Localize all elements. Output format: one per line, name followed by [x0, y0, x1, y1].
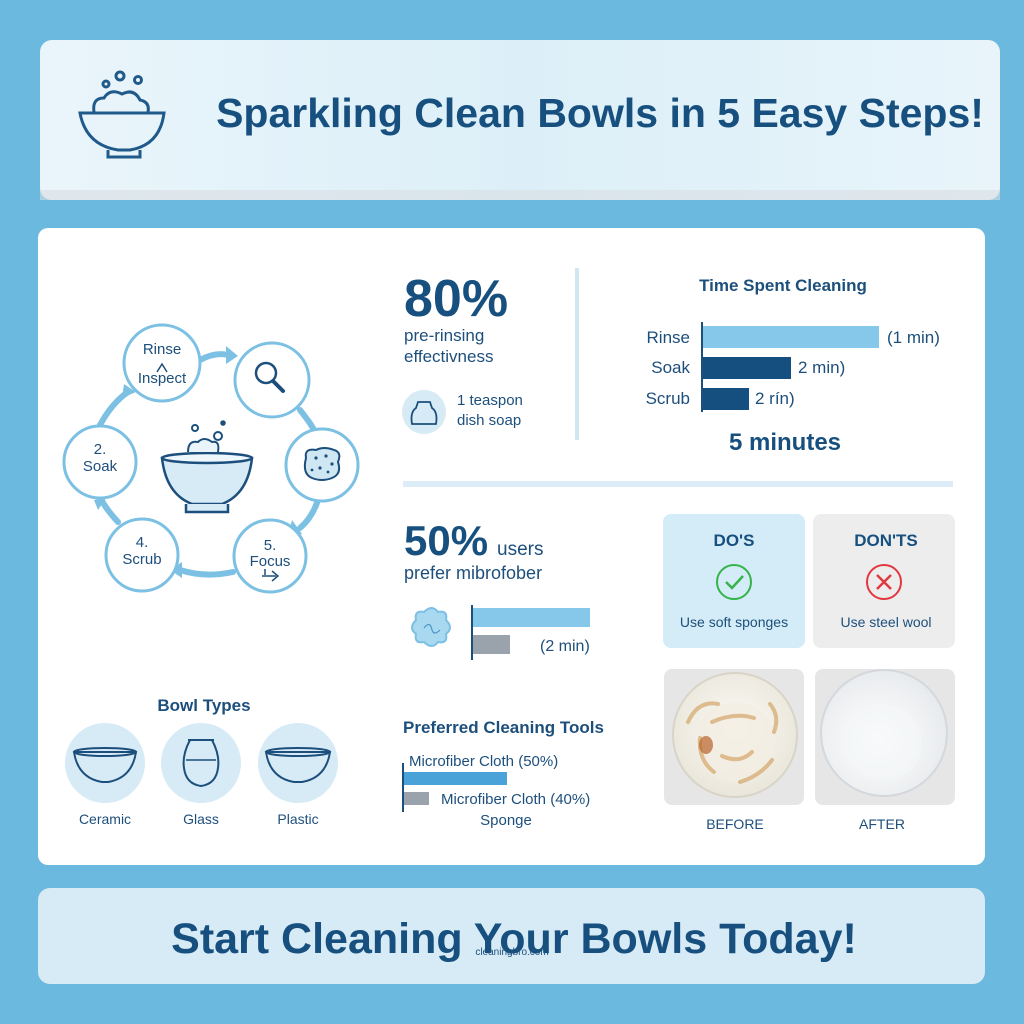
- panel: do's: Use soft sponges: [680, 614, 788, 630]
- photo: before: BEFORE: [706, 816, 764, 832]
- stat: 80%: [402, 270, 523, 434]
- stat: 80%: dish soap: [457, 412, 521, 429]
- icon: center bowl: [162, 422, 252, 512]
- stat: 80%: 1 teaspon: [457, 392, 523, 409]
- step: 4 Scrub: Scrub: [122, 551, 162, 568]
- step: magnifier: [235, 343, 309, 417]
- bar chart: preferred cleaning tools: Microfiber Cloth (40%): [441, 791, 590, 808]
- bar chart: time spent cleaning: Soak: [651, 358, 690, 377]
- bar chart: preferred cleaning tools: Microfiber Cloth (50%): [409, 753, 558, 770]
- step: 5 Focus: [234, 520, 306, 592]
- stat: 50%: (2 min): [540, 638, 590, 655]
- bowl types: [65, 696, 338, 827]
- panel: don'ts: DON'TS: [854, 531, 918, 550]
- icon: ceramic: Ceramic: [79, 811, 131, 827]
- bar chart: time spent cleaning: Time Spent Cleaning: [699, 276, 867, 295]
- bar chart: time spent cleaning: Scrub: [646, 389, 690, 408]
- step: 5 Focus: Focus: [250, 553, 290, 570]
- step: sponge: [286, 429, 358, 501]
- step: 2 Soak: 2.: [94, 441, 106, 458]
- step: Rinse Inspect: Rinse: [143, 341, 181, 358]
- step: Rinse Inspect: [124, 325, 200, 401]
- bar chart: time spent cleaning: [646, 276, 940, 456]
- icon: soap bottle: [402, 390, 446, 434]
- icon: bowl with bubbles: [80, 72, 164, 157]
- footer banner: Start Cleaning Your Bowls Today!: [171, 915, 857, 963]
- photo: before: [664, 669, 804, 832]
- footer banner: [38, 888, 985, 984]
- icon: cross: [867, 565, 901, 599]
- bar chart: time spent cleaning: 2 rín): [755, 389, 795, 408]
- stat: 50%: [404, 517, 590, 660]
- step: 2 Soak: [64, 426, 136, 498]
- panel: don'ts: Use steel wool: [840, 614, 932, 630]
- stat: 50%: 50%: [404, 517, 488, 564]
- photo: after: [815, 669, 955, 832]
- bar chart: time spent cleaning: 5 minutes: [729, 429, 841, 456]
- bowl types: Bowl Types: [157, 696, 251, 715]
- step: Rinse Inspect: Inspect: [138, 370, 187, 387]
- stat: 80%: effectivness: [404, 347, 493, 366]
- step: 5 Focus: 5.: [264, 537, 276, 554]
- header panel: [40, 40, 1000, 200]
- icon: microfiber cloth: [412, 608, 450, 646]
- step: 4 Scrub: [106, 519, 178, 591]
- cycle diagram: [64, 325, 358, 592]
- icon: plastic: Plastic: [277, 811, 319, 827]
- main panel: [38, 228, 985, 865]
- stat: 80%: pre-rinsing: [404, 326, 484, 345]
- step: 2 Soak: Soak: [83, 458, 118, 475]
- footer banner: cleaningbro.com: [475, 947, 549, 958]
- icon: check: [717, 565, 751, 599]
- stat: 50%: prefer mibrofober: [404, 563, 542, 583]
- panel: do's: DO'S: [714, 531, 754, 550]
- bar chart: time spent cleaning: (1 min): [887, 328, 940, 347]
- bar chart: preferred cleaning tools: Sponge: [480, 812, 532, 829]
- stat: 80%: 80%: [404, 270, 508, 328]
- panel: don'ts: [813, 514, 955, 648]
- stat: 50%: users: [497, 539, 543, 560]
- panel: do's: [663, 514, 805, 648]
- icon: glass: [161, 723, 241, 827]
- bar chart: time spent cleaning: Rinse: [647, 328, 690, 347]
- icon: ceramic: [65, 723, 145, 827]
- photo: after: AFTER: [859, 816, 905, 832]
- bar chart: preferred cleaning tools: Preferred Cleaning Tools: [403, 718, 604, 737]
- step: 4 Scrub: 4.: [136, 534, 148, 551]
- bar chart: time spent cleaning: 2 min): [798, 358, 845, 377]
- icon: plastic: [258, 723, 338, 827]
- title: Sparkling Clean Bowls in 5 Easy Steps!: [216, 90, 984, 136]
- bar chart: preferred cleaning tools: [403, 718, 604, 829]
- icon: glass: Glass: [183, 811, 219, 827]
